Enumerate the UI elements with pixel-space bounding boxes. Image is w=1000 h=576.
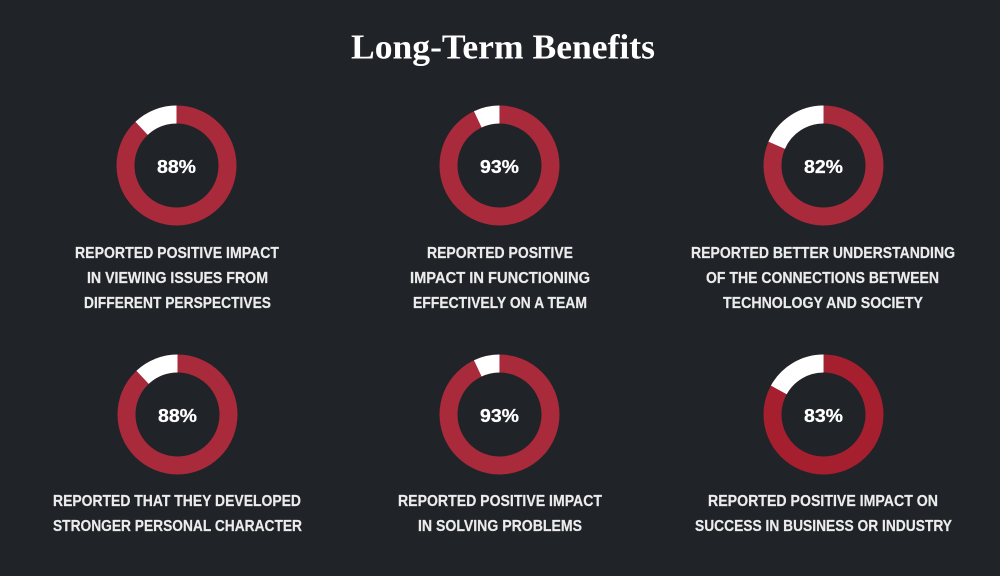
label: REPORTED BETTER UNDERSTANDING: [691, 245, 955, 262]
title: Long-Term Benefits: [351, 28, 655, 66]
label: DIFFERENT PERSPECTIVES: [84, 295, 271, 312]
donut chart: 93%: [432, 98, 567, 233]
donut chart: 88%: 88%: [158, 406, 197, 426]
panel: 82% technology and society: [691, 98, 955, 312]
label: IN VIEWING ISSUES FROM: [87, 270, 268, 287]
label: IN SOLVING PROBLEMS: [418, 518, 582, 535]
donut chart: 82%: [756, 98, 891, 233]
panel: 93% team: [410, 98, 590, 312]
label: REPORTED POSITIVE IMPACT: [398, 493, 602, 510]
label: [695, 493, 953, 535]
label: REPORTED THAT THEY DEVELOPED: [53, 493, 301, 510]
label: [410, 245, 590, 312]
panel: 88% personal character: [53, 342, 302, 535]
donut chart: 83%: 83%: [804, 406, 843, 426]
label: REPORTED POSITIVE IMPACT: [75, 245, 279, 262]
panel: 93% solving problems: [398, 347, 602, 535]
donut chart: 93%: 93%: [480, 406, 519, 426]
label: [53, 493, 302, 535]
label: SUCCESS IN BUSINESS OR INDUSTRY: [695, 518, 953, 535]
label: TECHNOLOGY AND SOCIETY: [723, 295, 924, 312]
donut chart: 82%: 82%: [804, 157, 843, 177]
label: STRONGER PERSONAL CHARACTER: [53, 518, 302, 535]
label: REPORTED POSITIVE: [427, 245, 573, 262]
label: [398, 493, 602, 535]
label: EFFECTIVELY ON A TEAM: [413, 295, 587, 312]
donut chart: 88%: [104, 93, 249, 238]
label: [691, 245, 955, 312]
donut chart: 88%: [105, 342, 250, 487]
donut chart: 83%: [754, 345, 893, 484]
donut chart: 93%: [432, 347, 567, 482]
label: REPORTED POSITIVE IMPACT ON: [708, 493, 938, 510]
panel: 88% different perspectives: [75, 93, 279, 312]
donut chart: 88%: 88%: [157, 157, 196, 177]
label: [75, 245, 279, 312]
label: IMPACT IN FUNCTIONING: [410, 270, 590, 287]
donut chart: 93%: 93%: [480, 157, 519, 177]
panel: 83% business or industry: [695, 345, 953, 535]
label: OF THE CONNECTIONS BETWEEN: [706, 270, 939, 287]
